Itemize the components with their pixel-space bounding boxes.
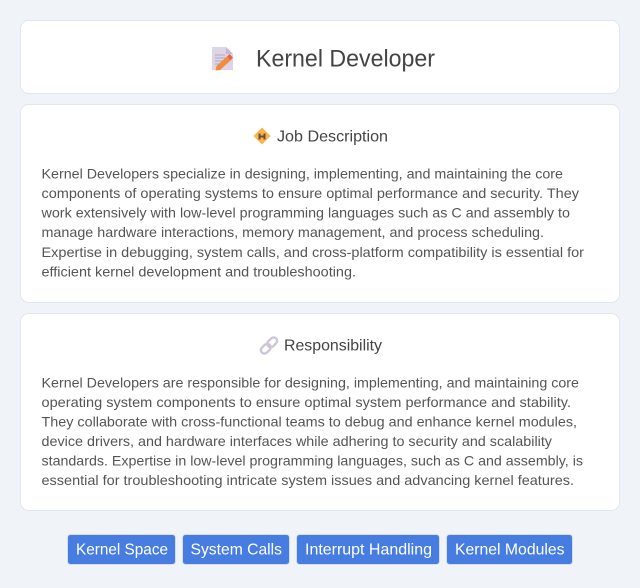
tag: interrupt handling — [296, 534, 440, 564]
tag row — [68, 534, 572, 564]
heading: responsibility: Responsibility — [284, 338, 382, 354]
text block: responsibility: standards. Expertise in low-level programming languages, such as C and assembly, is — [42, 452, 583, 468]
icon: orange diamond — [254, 128, 270, 144]
text block: job description: manage hardware interactions, memory management, and process scheduling. — [42, 224, 544, 240]
text block: responsibility: operating system components to ensure optimal system performance and stability. — [42, 394, 571, 410]
heading: job description: Job Description — [277, 128, 388, 146]
icon: document with pencil — [212, 47, 233, 70]
text block: job description: work extensively with low-level programming languages such as C and assembly to — [40, 205, 570, 221]
tag: interrupt handling: Interrupt Handling — [305, 542, 432, 558]
panel: job description — [20, 104, 620, 302]
tag: kernel modules — [446, 534, 572, 564]
panel: title header — [20, 20, 620, 94]
tag: system calls — [182, 534, 290, 564]
tag: kernel space — [68, 534, 176, 564]
text block: job description: Expertise in debugging, system calls, and cross-platform compatibility is essential for — [42, 244, 584, 260]
text block: job description — [40, 165, 584, 279]
text block: responsibility: Kernel Developers are responsible for designing, implementing, and maintaining core — [42, 374, 579, 390]
text block: responsibility — [42, 374, 583, 488]
tag: kernel modules: Kernel Modules — [455, 542, 564, 558]
icon: chain link — [259, 336, 279, 355]
text block: job description: Kernel Developers specialize in designing, implementing, and maintaining the core — [42, 165, 563, 181]
text block: responsibility: device drivers, and hardware interfaces while adhering to security and scalability — [42, 433, 552, 449]
text block: responsibility: They collaborate with cross-functional teams to debug and enhance kernel modules, — [42, 414, 577, 430]
text block: job description: components of operating systems to ensure optimal performance and security. They — [42, 185, 579, 201]
tag: kernel space: Kernel Space — [76, 542, 168, 558]
text block: job description: efficient kernel development and troubleshooting. — [42, 263, 356, 279]
tag: system calls: System Calls — [190, 542, 282, 558]
title: Kernel Developer — [256, 46, 435, 72]
text block: responsibility: essential for troubleshooting intricate system issues and advancing kernel features. — [42, 472, 574, 488]
panel: responsibility — [20, 314, 620, 510]
